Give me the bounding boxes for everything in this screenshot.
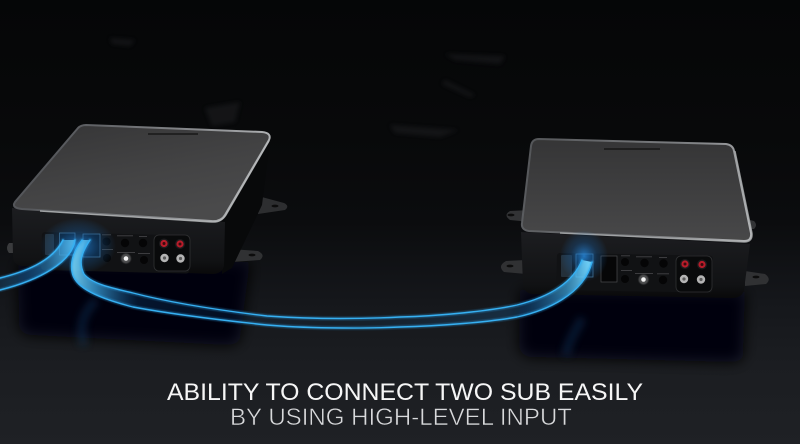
floor reflection: left subwoofer [18,262,250,345]
subwoofer: left [7,125,287,274]
brand mark [148,133,198,135]
knobs [621,258,668,284]
knobs [102,238,148,264]
caption line 2: BY USING HIGH-LEVEL INPUT [230,404,572,431]
floor reflection: right subwoofer [519,290,745,362]
cable: link between subwoofers [71,240,592,328]
subwoofer: right [501,139,769,298]
connector panel [556,253,713,293]
front face [12,208,225,274]
reflected cable glow [82,300,582,355]
mounting tabs [7,196,287,262]
caption [167,379,643,431]
top panel with rim [522,139,751,241]
brand mark [604,148,660,150]
front rim highlight [560,151,752,242]
top panel with rim [14,125,270,221]
tiny labels [621,256,669,274]
power LED [638,274,648,284]
front face [521,232,750,298]
RCA block [154,235,190,271]
port glows [40,218,608,282]
mounting tabs [501,210,769,286]
side wall [222,140,270,274]
connector panel [41,232,190,274]
power LED [121,254,131,264]
front rim highlight [40,141,269,222]
cable: left input lead [0,240,75,290]
tiny labels [102,234,150,254]
caption line 1: ABILITY TO CONNECT TWO SUB EASILY [167,379,643,406]
RCA block [676,256,712,292]
background streak texture [110,38,505,137]
